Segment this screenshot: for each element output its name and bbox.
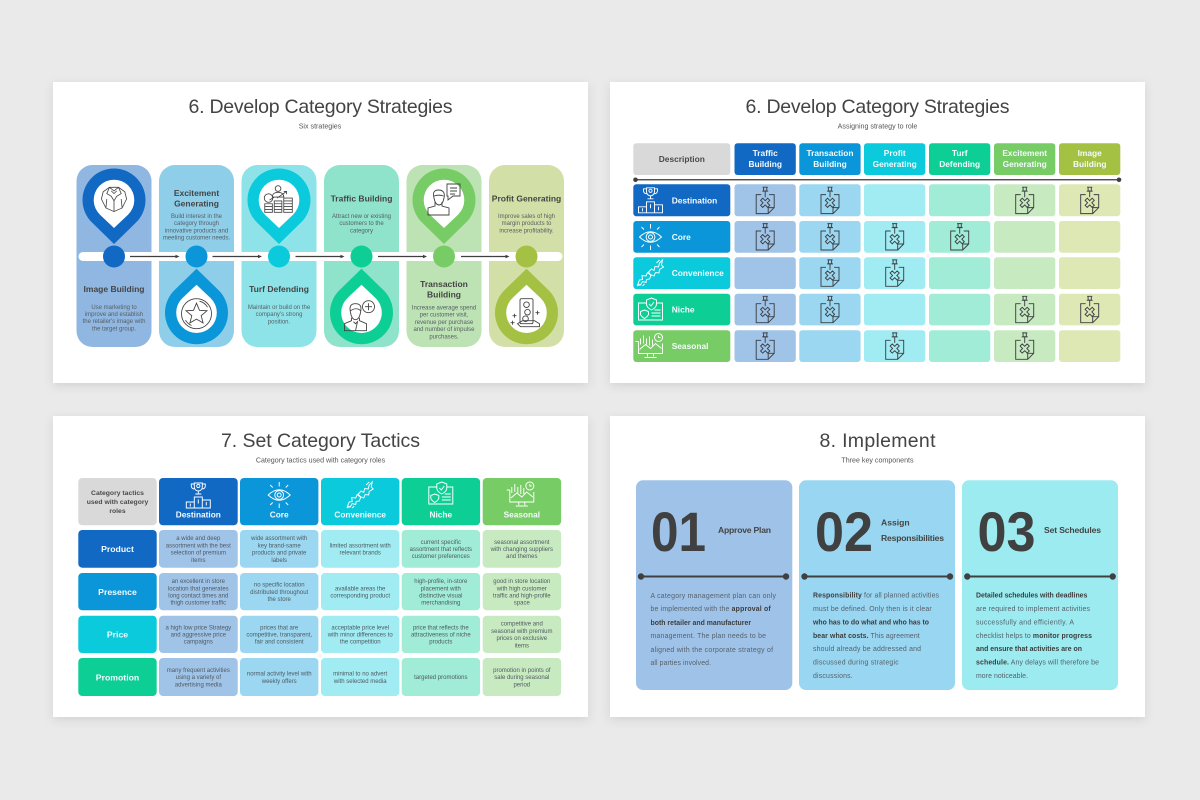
text: image building: the target group. xyxy=(92,326,136,332)
row: product: with changing suppliers xyxy=(490,547,553,553)
subtitle: category tactics used: Category tactics used with category roles xyxy=(256,456,386,464)
row: product: selection of premium xyxy=(171,551,226,557)
row: seasonal xyxy=(633,330,1120,362)
text: transaction building: Building xyxy=(427,290,461,300)
row: promotion: Promotion xyxy=(96,672,139,682)
table header row xyxy=(78,478,561,525)
row: product: current specific xyxy=(421,540,461,546)
row: price: price that reflects the xyxy=(413,625,469,631)
table header row: Defending xyxy=(939,159,980,169)
card 02: assign responsibilities: discussed during strategic xyxy=(813,660,899,666)
text: excitement generating: Generating xyxy=(174,198,219,208)
text: profit generating: margin products to xyxy=(502,221,552,227)
row: product: assortment that reflects xyxy=(410,547,472,553)
table header row: Transaction xyxy=(806,148,854,158)
text: profit generating: Profit Generating xyxy=(492,193,561,203)
panel: implement xyxy=(610,416,1145,717)
table header row: Niche xyxy=(430,510,452,520)
text: traffic building: customers to the xyxy=(339,221,384,227)
text: profit generating: increase profitability. xyxy=(499,228,554,234)
column: traffic building background xyxy=(324,165,399,347)
row: promotion: promotion in points of xyxy=(493,668,551,674)
row: presence: distinctive visual xyxy=(419,594,462,600)
card 03: set schedules: schedule. Any delays will therefore be xyxy=(976,660,1099,666)
table header row: Convenience xyxy=(334,510,386,520)
row: product: labels xyxy=(271,558,287,564)
table header row: Image xyxy=(1078,148,1102,158)
row: promotion: sale during seasonal xyxy=(494,675,549,681)
table header row xyxy=(633,143,1120,175)
table header row: Generating xyxy=(873,159,917,169)
title: set category tactics: 7. Set Category Tactics xyxy=(221,430,420,452)
pin: turf defending with investor icon xyxy=(248,169,310,244)
table header row: Traffic xyxy=(753,148,778,158)
subtitle: three key components: Three key components xyxy=(841,456,914,464)
card 02: assign responsibilities: Assign xyxy=(881,518,910,528)
row: presence: merchandising xyxy=(421,601,460,607)
text: traffic building: category xyxy=(350,228,373,234)
row: product: items xyxy=(191,558,205,564)
card 02: assign responsibilities: who has to do what and who has to xyxy=(812,620,929,626)
row: price: seasonal with premium xyxy=(491,629,552,635)
row: product: assortment with the best xyxy=(166,543,231,549)
column: turf defending background xyxy=(242,165,316,347)
row: price: with minor differences to xyxy=(327,632,393,638)
text: transaction building: Increase average spend xyxy=(412,306,476,312)
card 02: assign responsibilities: should already be addressed and xyxy=(813,646,921,653)
row: niche xyxy=(633,294,1120,325)
text: image building: Use marketing to xyxy=(91,305,137,311)
row: price: competitive, transparent, xyxy=(246,632,312,638)
row: presence: Presence xyxy=(98,587,137,597)
table header row: Building xyxy=(813,159,847,169)
card 03: set schedules: checklist helps to monitor progress xyxy=(976,633,1092,640)
row: promotion xyxy=(78,658,561,696)
table header row: Turf xyxy=(952,148,968,158)
text: traffic building: Traffic Building xyxy=(331,193,392,203)
card 01: approve plan: all parties involved. xyxy=(650,660,711,667)
text: image building: improve and establish xyxy=(85,312,143,318)
row: core xyxy=(633,221,1120,253)
row: price: attractiveness of niche xyxy=(411,632,471,638)
card 03: set schedules: 03 xyxy=(978,500,1036,563)
row: price xyxy=(78,616,561,653)
row: presence: an excellent in store xyxy=(172,579,226,585)
row: product: a wide and deep xyxy=(176,536,221,542)
row: presence: placement with xyxy=(421,586,461,592)
row: product: and themes xyxy=(506,554,537,560)
text: transaction building: per customer visit, xyxy=(420,313,469,319)
row: price: and aggressive price xyxy=(171,632,227,638)
card 01: approve plan: A category management plan can only xyxy=(650,593,777,600)
table header row: Profit xyxy=(884,148,906,158)
text: profit generating xyxy=(492,193,561,234)
title: develop category strategies: 6. Develop Category Strategies xyxy=(746,96,1010,118)
row: presence: corresponding product xyxy=(330,594,390,600)
table header row: Core xyxy=(270,510,289,520)
row: product: key brand-same xyxy=(258,543,301,549)
text: excitement generating: category through xyxy=(174,221,219,227)
row: presence: traffic and high-profile xyxy=(493,594,551,600)
row: product: Product xyxy=(101,544,134,554)
row: price: competitive and xyxy=(501,622,543,628)
text: transaction building: Transaction xyxy=(420,279,468,289)
header divider with end dots xyxy=(633,178,1121,182)
text: turf defending: position. xyxy=(268,319,291,325)
column: transaction building background xyxy=(406,165,482,347)
table header row: Seasonal xyxy=(504,510,540,520)
text: transaction building: and number of impulse xyxy=(413,327,475,333)
card 01: approve plan: 01 xyxy=(651,500,706,563)
row: product: customer preferences xyxy=(412,554,470,560)
card 03: set schedules xyxy=(962,480,1118,690)
row: price: fair and consistent xyxy=(255,640,304,646)
row: niche: Niche xyxy=(672,304,695,314)
row: promotion: advertising media xyxy=(175,682,222,688)
card 01: approve plan xyxy=(636,480,792,690)
card 03: set schedules: and ensure that activities are on xyxy=(976,646,1082,653)
column: excitement generating background xyxy=(159,165,234,347)
table header row: Excitement xyxy=(1002,148,1047,158)
text: traffic building xyxy=(331,193,392,234)
row: product: seasonal assortment xyxy=(494,540,550,546)
drop: excitement generating with star icon xyxy=(165,269,228,344)
row: product: limited assortment with xyxy=(330,543,391,549)
card 01: approve plan: management. The plan needs to be xyxy=(650,633,766,640)
card 01: approve plan: be implemented with the approval of xyxy=(650,606,771,613)
row: promotion: minimal to no advert xyxy=(333,672,388,678)
panel: six strategies xyxy=(53,82,588,383)
timeline nodes xyxy=(103,246,538,268)
text: image building xyxy=(83,284,145,332)
row: presence: space xyxy=(514,601,530,607)
text: excitement generating xyxy=(163,188,231,242)
row: core: Core xyxy=(672,232,691,242)
row: presence: distributed throughout xyxy=(250,590,309,596)
row: price: acceptable price level xyxy=(331,625,389,631)
row: presence: with high customer xyxy=(496,586,547,592)
card 01: approve plan: both retailer and manufacturer xyxy=(650,620,751,627)
row: destination: Destination xyxy=(672,195,717,205)
timeline bar xyxy=(78,252,562,261)
row: price: campaigns xyxy=(184,640,213,646)
drop: traffic building with person plus icon xyxy=(330,269,393,344)
card 02: assign responsibilities: must be defined. Only then is it clear xyxy=(813,606,932,613)
subtitle: assigning strategy to role: Assigning strategy to role xyxy=(838,122,917,130)
card 03: set schedules: Set Schedules xyxy=(1044,525,1101,535)
row: price: products xyxy=(429,640,452,646)
text: excitement generating: meeting customer needs. xyxy=(163,236,231,242)
row: presence: location that generates xyxy=(168,586,229,592)
row: presence: available areas the xyxy=(335,586,386,592)
card 02: assign responsibilities: 02 xyxy=(815,500,873,563)
row: presence: no specific location xyxy=(254,583,305,589)
text: turf defending: Turf Defending xyxy=(249,284,309,294)
row: presence: thigh customer traffic xyxy=(171,601,226,607)
text: turf defending: Maintain or build on the xyxy=(248,305,311,311)
card 03: set schedules: Detailed schedules with deadlines xyxy=(976,592,1087,600)
text: transaction building: purchases. xyxy=(429,334,459,340)
card 02: assign responsibilities xyxy=(799,480,955,690)
pin: image building with jacket icon xyxy=(82,169,146,244)
row: presence: the store xyxy=(268,597,292,603)
pin: transaction building with speech icon xyxy=(412,169,476,244)
text: image building: Image Building xyxy=(84,284,144,294)
text: transaction building xyxy=(412,279,476,340)
text: traffic building: Attract new or existing xyxy=(332,214,391,220)
arrows between nodes xyxy=(130,255,510,258)
table header row: used with category xyxy=(87,499,148,506)
row: product: products and private xyxy=(252,551,307,557)
text: excitement generating: Excitement xyxy=(174,188,219,198)
column: image building background xyxy=(76,165,152,347)
card 01: approve plan: aligned with the corporate strategy of xyxy=(650,647,773,654)
card 03: set schedules: successfully and efficiently. A xyxy=(976,620,1074,626)
text: profit generating: Improve sales of high xyxy=(498,214,555,220)
title: implement: 8. Implement xyxy=(820,430,936,452)
row: price: prices that are xyxy=(260,625,299,631)
column: profit generating background xyxy=(489,165,564,347)
row: promotion: many frequent activities xyxy=(167,668,230,674)
card 02: assign responsibilities: bear what costs. This agreement xyxy=(813,633,920,640)
card 02: assign responsibilities: Responsibilities xyxy=(881,533,944,543)
card 02: assign responsibilities: discussions. xyxy=(813,673,853,680)
row: price: the competition xyxy=(340,640,381,646)
text: transaction building: revenue per purchase xyxy=(415,320,474,326)
row: product: wide assortment with xyxy=(250,536,307,542)
text: turf defending: company's strong xyxy=(256,312,302,318)
row: promotion: period xyxy=(513,682,530,688)
table header row: Building xyxy=(748,159,782,169)
text: excitement generating: Build interest in the xyxy=(171,214,223,220)
row: presence: long contact times and xyxy=(168,594,228,600)
row: presence: good in store location xyxy=(493,579,550,585)
row: promotion: using a variety of xyxy=(176,675,221,681)
panel: category tactics xyxy=(53,416,588,717)
row: price: items xyxy=(515,643,529,649)
row: convenience: Convenience xyxy=(672,268,724,278)
card 01: approve plan: Approve Plan xyxy=(718,525,771,535)
drop: profit generating with phone icon xyxy=(495,269,558,344)
row: price: Price xyxy=(107,630,128,640)
text: turf defending xyxy=(248,284,311,325)
row: price: prices on exclusive xyxy=(496,636,548,642)
text: excitement generating: innovative products and xyxy=(165,228,228,234)
row: seasonal: Seasonal xyxy=(672,341,708,351)
text: image building: the retailer's image with xyxy=(83,319,145,325)
row: promotion: weekly offers xyxy=(261,679,297,685)
table header row: Generating xyxy=(1003,159,1047,169)
table header row: roles xyxy=(109,508,126,515)
row: promotion: targeted promotions xyxy=(414,675,467,681)
table header row: Description xyxy=(659,154,705,164)
row: promotion: normal activity level with xyxy=(247,672,312,678)
row: destination xyxy=(633,184,1120,216)
table header row: Destination xyxy=(176,510,221,520)
row: product: relevant brands xyxy=(340,551,381,557)
card 03: set schedules: are required to implement activities xyxy=(976,606,1091,613)
title: develop category strategies: 6. Develop Category Strategies xyxy=(188,96,453,118)
table header row: Category tactics xyxy=(91,490,144,497)
row: price: a high low price Strategy xyxy=(165,625,231,631)
card 02: assign responsibilities: Responsibility for all planned activities xyxy=(813,592,940,600)
row: product xyxy=(78,530,561,568)
subtitle: six strategies: Six strategies xyxy=(299,122,342,130)
table header row: Building xyxy=(1073,159,1106,169)
row: convenience xyxy=(633,257,1120,289)
row: presence: high-profile, in-store xyxy=(414,579,468,585)
card 03: set schedules: more noticeable. xyxy=(976,673,1028,680)
row: presence xyxy=(78,573,561,610)
row: promotion: with selected media xyxy=(333,679,387,685)
panel: assigning strategy to role xyxy=(610,82,1145,383)
